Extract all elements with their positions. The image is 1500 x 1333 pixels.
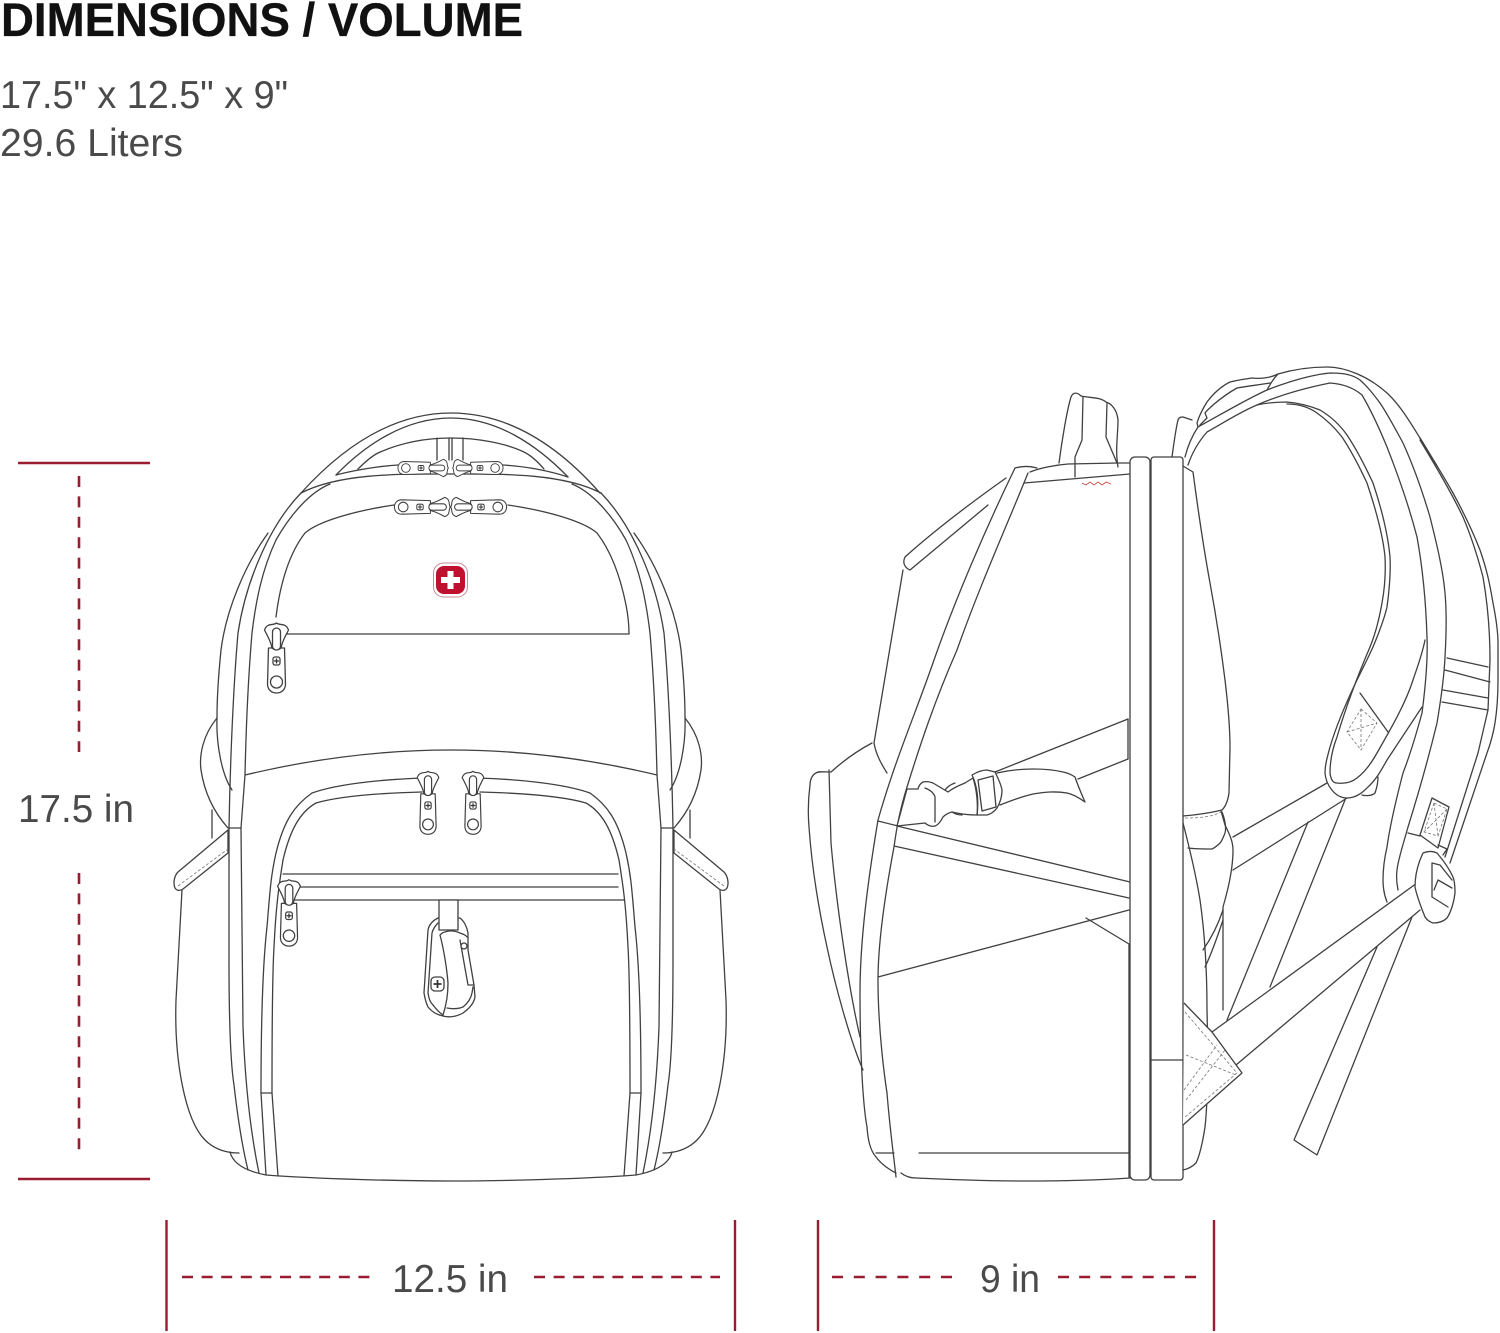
left half outline	[174, 474, 451, 1181]
dimensions text: 29.6 Liters	[0, 122, 183, 165]
front zipper pulls	[417, 771, 484, 834]
back panel	[1183, 466, 1233, 1170]
second line	[1185, 373, 1446, 890]
second zipper pulls	[394, 497, 507, 517]
top of bag	[1015, 463, 1130, 485]
backpack side view	[808, 367, 1498, 1181]
inner loop	[1257, 402, 1422, 798]
shoulder strap	[1185, 367, 1498, 902]
front strap lines	[860, 468, 1028, 1177]
backpack front view	[174, 413, 728, 1181]
icon: swiss cross logo	[434, 563, 468, 597]
stitched patch	[1183, 1003, 1242, 1125]
height dimension: 17.5 in	[18, 788, 134, 831]
depth dimension: 9 in	[980, 1258, 1040, 1301]
small zipper pull	[278, 880, 300, 946]
top grab handle	[1059, 393, 1118, 477]
loop patch	[1360, 693, 1388, 732]
side panels	[878, 821, 1130, 977]
side handle	[904, 478, 1006, 570]
dimensions text: 17.5" x 12.5" x 9"	[0, 74, 288, 117]
carabiner	[424, 900, 475, 1017]
left zipper pull	[264, 623, 288, 693]
bag bottom	[901, 1153, 1130, 1181]
right half outline	[451, 474, 728, 1181]
upper zipper pulls	[398, 459, 503, 477]
center strips	[1129, 457, 1183, 1180]
lower pocket zipper lines	[283, 874, 624, 900]
top handle	[301, 413, 600, 493]
webbing bands	[1442, 658, 1490, 710]
outer inner edge	[1420, 440, 1490, 857]
shoulder strap patch and adjuster	[1408, 798, 1455, 923]
depth dimension	[818, 1220, 1214, 1331]
width dimension	[166, 1220, 735, 1331]
upper body outline	[874, 570, 903, 773]
lower straps	[1212, 783, 1420, 1155]
height dimension	[18, 463, 150, 1179]
width dimension: 12.5 in	[392, 1258, 508, 1301]
third line	[1188, 383, 1427, 902]
upper pocket	[276, 505, 629, 634]
sternum strap and buckle	[897, 719, 1128, 826]
shoulder grab loop	[1172, 374, 1278, 457]
outer edge	[1278, 367, 1498, 863]
front pocket	[808, 743, 872, 1070]
dimensions text	[0, 74, 288, 165]
